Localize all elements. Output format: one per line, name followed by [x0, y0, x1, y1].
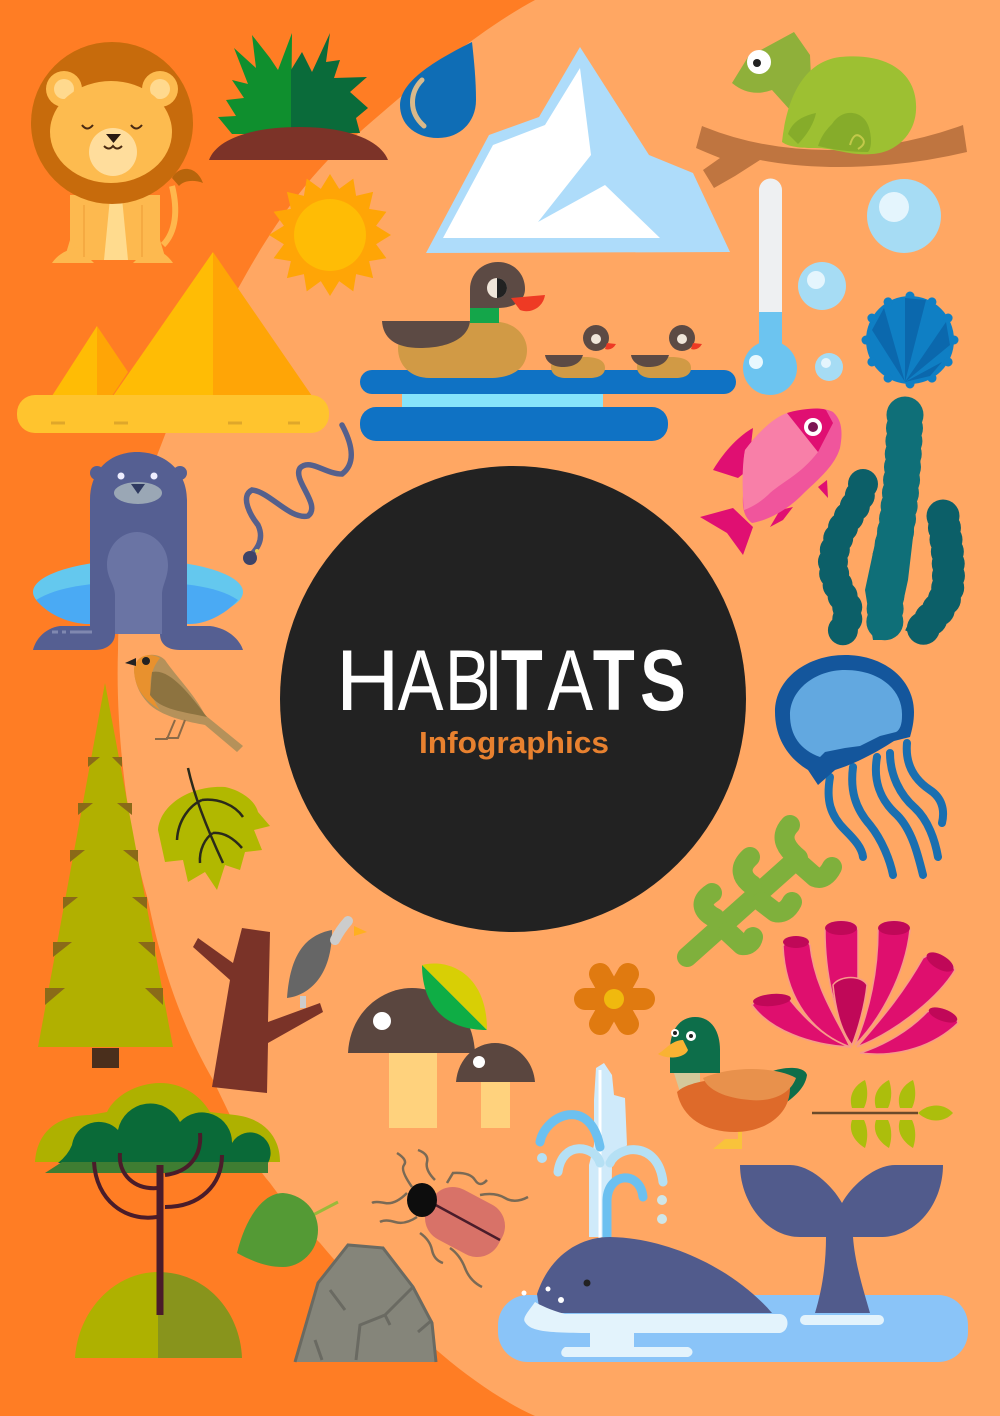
- title: ABI: [398, 633, 503, 729]
- subtitle: Infographics: [419, 725, 609, 760]
- icon: rocks: [295, 1245, 436, 1362]
- icon: flower: [585, 974, 644, 1024]
- icon: thermometer: [743, 179, 797, 395]
- icon: lion: [31, 42, 203, 263]
- icon: whale tail: [740, 1165, 943, 1313]
- title: TS: [593, 633, 686, 729]
- icon: pink coral: [752, 921, 959, 1054]
- icon: mallard duck: [658, 1017, 807, 1149]
- icon: sun: [269, 174, 391, 296]
- icon: savanna tree: [35, 1083, 280, 1358]
- icon: pyramids: [17, 252, 329, 433]
- main circle: [280, 466, 746, 932]
- icon: snake: [243, 425, 351, 565]
- icon: mushrooms: [348, 964, 535, 1128]
- icon: green leaf: [237, 1193, 338, 1267]
- title: T: [501, 633, 543, 729]
- icon: fountain: [537, 1063, 667, 1240]
- title: A: [547, 633, 593, 729]
- title: H: [336, 633, 400, 729]
- icon: beetle: [372, 1150, 528, 1287]
- icon: fish: [700, 409, 842, 555]
- icon: jellyfish: [775, 655, 943, 875]
- icon: duck family on water: [360, 262, 736, 441]
- icon: seal: [33, 452, 243, 650]
- icon: leaf with veins: [158, 768, 270, 890]
- icon: green coral: [687, 825, 832, 957]
- icon: chameleon on branch: [696, 32, 967, 188]
- icon: fir tree: [38, 683, 173, 1068]
- icon: whale in water: [498, 1237, 968, 1362]
- icon: seaweed: [833, 403, 948, 640]
- icon: grass mound: [209, 33, 388, 160]
- title: [336, 633, 686, 729]
- icon: water drop: [400, 42, 476, 138]
- icon: dead tree with vulture: [193, 921, 367, 1093]
- icon: bubbles: [798, 179, 941, 381]
- icon: small sprig: [812, 1080, 953, 1148]
- icon: shell: [866, 296, 954, 384]
- icon: iceberg: [426, 47, 730, 253]
- icon: robin: [125, 655, 243, 752]
